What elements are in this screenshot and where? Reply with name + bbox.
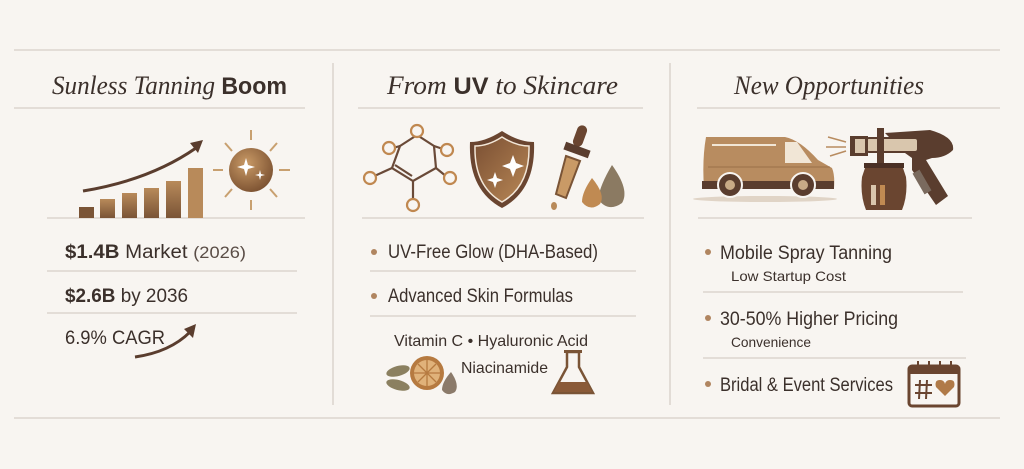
heading: New Opportunities: New Opportunities	[733, 71, 924, 100]
stat: CAGR with arrow: 6.9% CAGR	[65, 328, 165, 349]
ingredients text: Vitamin C • Hyaluronic Acid	[394, 333, 588, 350]
icon: dropper and drops	[551, 124, 624, 210]
icon: van	[693, 137, 837, 202]
bullet: advanced skin formulas: Advanced Skin Formulas	[388, 286, 573, 307]
bullet: bridal & event services: Bridal & Event Services	[720, 375, 893, 396]
bullet: mobile spray tanning: Mobile Spray Tanning	[720, 243, 892, 264]
heading: Sunless Tanning Boom: Sunless Tanning Boom	[52, 71, 287, 100]
ingredients text: Niacinamide	[461, 360, 548, 377]
icon: molecule	[364, 125, 456, 211]
bar chart with arrow	[79, 140, 203, 218]
ingredients text	[394, 333, 588, 377]
panel: sunless tanning boom	[52, 71, 290, 357]
bullet: mobile spray tanning	[705, 243, 892, 284]
icon: orange slice with leaves	[385, 356, 457, 394]
stat: market 2026: $1.4B Market (2026)	[65, 242, 246, 263]
icon: sun	[213, 130, 290, 210]
panel: from UV to skincare	[364, 71, 624, 394]
heading: From UV to Skincare: From UV to Skincare	[386, 71, 618, 100]
icon: shield	[470, 131, 534, 208]
icon: calendar	[909, 361, 959, 406]
bullet: higher pricing: Convenience	[731, 334, 811, 350]
icon: flask	[553, 350, 593, 393]
icon: spray gun	[826, 128, 953, 210]
bullet: higher pricing: 30-50% Higher Pricing	[720, 309, 898, 330]
panel: new opportunities	[693, 71, 959, 406]
stat: CAGR with arrow	[65, 324, 196, 357]
bullet: mobile spray tanning: Low Startup Cost	[731, 268, 846, 284]
stat: 2036: $2.6B by 2036	[65, 286, 188, 307]
bullet: UV-free glow: UV-Free Glow (DHA-Based)	[388, 242, 598, 263]
bullet: higher pricing	[705, 309, 898, 350]
